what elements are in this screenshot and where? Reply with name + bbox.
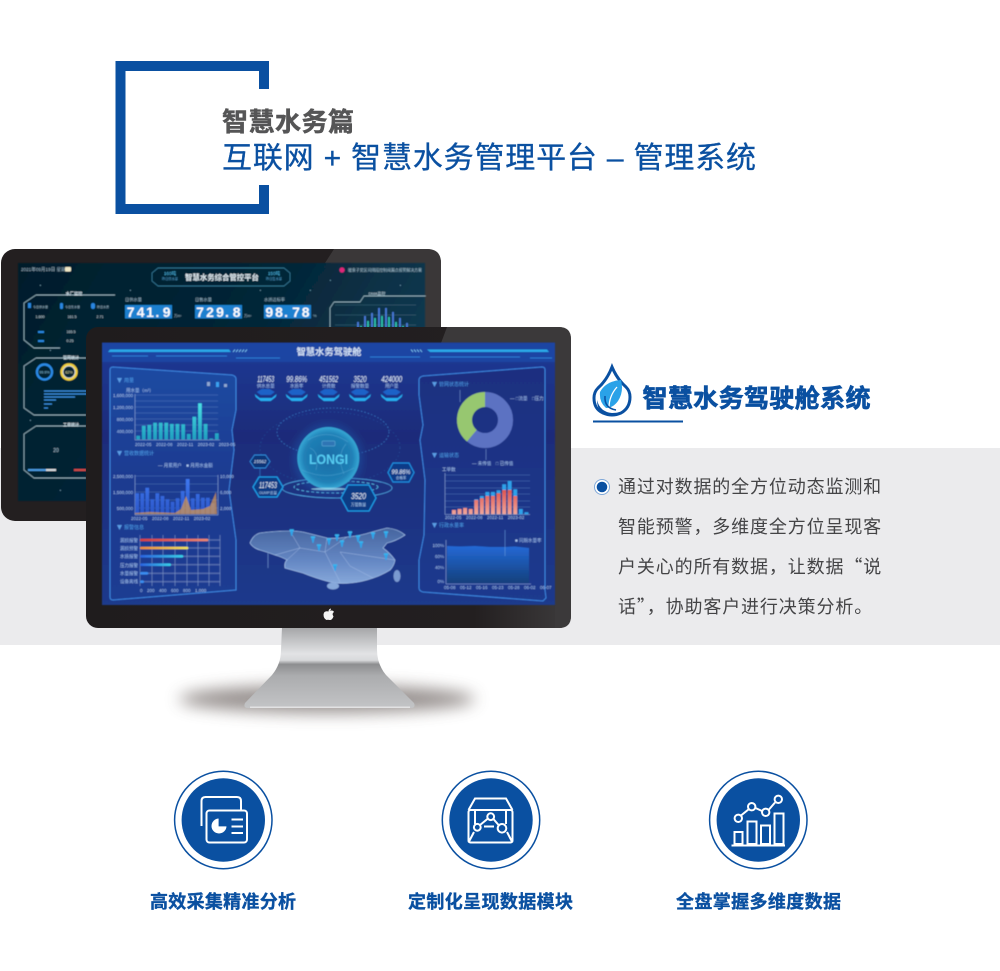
chart: qualified rate area: 行政水量率	[439, 522, 464, 529]
panel: pipe network statistics: 99.9%	[39, 370, 50, 374]
icon: data box	[442, 771, 540, 869]
panel: water plant: 165.5	[66, 330, 76, 334]
KPI counters	[125, 296, 317, 320]
back monitor bezel	[1, 249, 441, 521]
chart: qualified rate area: 60%	[435, 554, 444, 559]
back monitor	[1, 249, 441, 521]
feature: customised modules	[408, 771, 573, 912]
chart: water volume bars: 2022-05 2022-08 2022-11 2023-02 2023-05	[135, 442, 236, 447]
chart: alarm horizontal bars: 水质报警	[120, 553, 138, 560]
KPI row: 3520	[354, 375, 367, 384]
chart: transmission status bars: 工单数	[442, 466, 456, 473]
chart: qualified rate area: ■ 同期水量率	[515, 537, 542, 544]
KPI row: 99.86%	[286, 375, 307, 384]
panel: water plant: 今日供水量	[33, 304, 48, 309]
panel: pipe network statistics: 管网统计	[63, 354, 79, 360]
chart: transmission status bars: 2022-05 2022-08 2022-11 2023-02	[445, 515, 525, 520]
KPI row: 报警数量	[351, 382, 369, 390]
chart: alarm horizontal bars: 报警信息	[124, 524, 144, 531]
chart: revenue data bars	[113, 450, 234, 521]
globe label	[322, 441, 335, 446]
label: 高效采集精准分析	[150, 891, 296, 912]
KPI counters: 741.9	[127, 304, 171, 320]
KPI row: 水质率	[290, 382, 304, 390]
KPI row: 计费数	[322, 382, 336, 390]
chart: alarm horizontal bars: 漏损预警	[120, 545, 138, 552]
label: 全盘掌握多维度数据	[676, 891, 841, 912]
front monitor	[86, 327, 571, 628]
hexagon stats: 117453	[259, 481, 277, 490]
panel: left charts	[110, 367, 236, 600]
hexagon stats: 15562	[254, 459, 267, 464]
LONGI logo text: LONGI	[309, 451, 348, 467]
KPI row: 424000	[381, 375, 403, 384]
chart: qualified rate area	[432, 522, 552, 590]
chart: device status donut: — □流量 □压力	[510, 395, 544, 402]
chart: water volume bars: 用量	[124, 377, 134, 384]
central globe	[260, 408, 400, 498]
main heading: 互联网 + 智慧水务管理平台 – 管理系统	[222, 142, 756, 175]
front monitor bezel	[86, 327, 571, 628]
description text: 话”，协助客户进行决策分析。	[618, 593, 873, 619]
apple logo icon	[324, 608, 334, 620]
back dashboard header: 智慧水务综合管控平台	[185, 273, 259, 282]
panel: pipe network statistics	[24, 354, 95, 415]
KPI counters: 98.78	[265, 304, 310, 320]
chart: water volume bars: 800,000	[117, 417, 133, 422]
China map	[250, 528, 405, 590]
chart: revenue data bars: 2,000	[220, 506, 232, 511]
back dashboard header	[152, 268, 290, 286]
KPI row: 用户量	[385, 382, 399, 390]
description text: 智能预警，多维度全方位呈现客	[618, 517, 882, 537]
hexagon stats: GUMP总量	[259, 490, 277, 495]
panel: pipe network statistics: 62%	[65, 370, 73, 374]
KPI counters: 万m³	[244, 314, 252, 318]
chart: alarm horizontal bars: 压力报警	[120, 562, 138, 569]
feature: multidimensional data	[676, 771, 841, 912]
hexagon stats	[250, 455, 414, 511]
KPI row: 451562	[319, 375, 339, 384]
description text: 通过对数据的全方位动态监测和	[618, 477, 882, 497]
chart: revenue data bars: 营收数据统计	[124, 450, 154, 457]
panel: DMA chart	[330, 290, 426, 335]
title	[222, 107, 756, 175]
back monitor screen	[18, 263, 426, 501]
dashboard screen	[102, 342, 555, 605]
section heading: 智慧水务篇	[222, 107, 354, 137]
panel: water plant: 0.25	[66, 339, 74, 343]
chart: qualified rate area: 05-08 05-12 05-16 05-23 05-28 06-02 06-07	[444, 585, 552, 590]
chart: water volume bars: 1,200,000	[113, 405, 133, 410]
chart: revenue data bars: 1,500,000	[113, 490, 133, 495]
panel: work orders: 20	[53, 448, 59, 454]
monitor stand	[244, 627, 415, 708]
panel: water plant: 今日售水量	[65, 304, 80, 309]
chart: transmission status bars	[432, 452, 530, 520]
panel: water plant: 161.5	[68, 315, 76, 319]
chart: device status donut	[432, 381, 544, 467]
back dashboard header: 昨日售水量	[266, 276, 283, 281]
chart: device status donut: — 未传值 □ 已传值	[472, 460, 514, 467]
chart: alarm horizontal bars	[117, 524, 220, 593]
chart: transmission status bars: 运输状态	[439, 452, 459, 459]
back dashboard header: 昨日供水量	[162, 276, 179, 281]
chart: qualified rate area: 0%	[437, 579, 444, 584]
panel: water plant: 水厂监控	[66, 290, 83, 297]
KPI counters: %	[313, 313, 317, 318]
KPI row: 供水总量	[257, 382, 275, 390]
bullet	[594, 480, 610, 494]
icon: water drop logo	[594, 367, 630, 416]
description text: 户关心的所有数据，让数据“说	[618, 553, 882, 579]
heading underline	[593, 420, 683, 422]
hexagon stats: 万管数量	[351, 502, 366, 507]
chart: device status donut: 管网状态统计	[439, 381, 469, 388]
chart: water volume bars: 1,600,000	[113, 393, 133, 398]
dashboard header	[102, 343, 555, 362]
chart: water volume bars	[113, 377, 236, 447]
system heading: 智慧水务驾驶舱系统	[642, 385, 870, 413]
chart: revenue data bars: 2022-05 2022-08 2022-11 2023-02	[131, 516, 211, 521]
chart: revenue data bars: 500,000	[117, 506, 133, 511]
chart: water volume bars: 400,000	[117, 429, 133, 434]
KPI counters: 水质达标率	[264, 296, 285, 303]
panel: water plant: 昨日水质	[97, 304, 109, 309]
hexagon stats: 合格率	[396, 475, 407, 480]
alert notice: 暖泉子党区间隔段控制阀漏点报警解决方案	[348, 268, 422, 272]
grey band	[0, 448, 1000, 645]
chart: alarm horizontal bars: 设备离线	[120, 578, 138, 585]
KPI counters: 日售水量	[195, 296, 212, 303]
dashboard title: 智慧水务驾驶舱	[296, 346, 362, 357]
KPI counters: 729.8	[196, 304, 241, 320]
date: 2021年09月19日 星期日	[21, 266, 70, 273]
feature: efficient collection	[150, 771, 296, 912]
panel: work orders: 工单统计	[63, 421, 79, 427]
chart: revenue data bars: 2,500,000	[113, 474, 133, 479]
chart: revenue data bars: 6,000	[220, 490, 232, 495]
chart: alarm horizontal bars: 水量报警	[120, 570, 138, 577]
panel: water plant: 1,600	[36, 315, 44, 319]
label: 定制化呈现数据模块	[408, 891, 573, 912]
chart: water volume bars: 用水量（m³）	[126, 387, 154, 394]
description text	[618, 477, 882, 619]
stand shadow	[179, 685, 475, 713]
panel: right charts	[419, 367, 552, 601]
hexagon stats: 3520	[351, 492, 366, 501]
panel: water plant: 2.71	[96, 315, 104, 319]
chart: qualified rate area: 40%	[435, 565, 444, 570]
chart: qualified rate area: 100%	[432, 543, 444, 548]
chart: revenue data bars: 10,000	[220, 474, 234, 479]
chart: alarm horizontal bars: 0 200 400 600 800 1,000	[140, 588, 207, 593]
back dashboard header: 150吨	[268, 270, 281, 276]
hexagon stats: 99.86%	[392, 469, 411, 476]
panel: water plant	[24, 290, 115, 348]
KPI row	[255, 375, 403, 401]
panel: work orders	[24, 421, 86, 478]
icon: data cards	[175, 771, 272, 869]
icon: bar and line chart	[710, 771, 807, 869]
panel: DMA chart: DMA监控	[369, 290, 385, 296]
KPI counters: 日供水量	[125, 296, 142, 303]
KPI counters: 万m³	[174, 314, 182, 318]
KPI row: 117453	[257, 375, 275, 384]
title bracket	[116, 61, 269, 214]
chart: alarm horizontal bars: 漏损报警	[120, 537, 138, 544]
back dashboard header: 160吨	[164, 270, 177, 276]
chart: revenue data bars: — 月累用户 ■ 月用水金额	[158, 462, 213, 469]
